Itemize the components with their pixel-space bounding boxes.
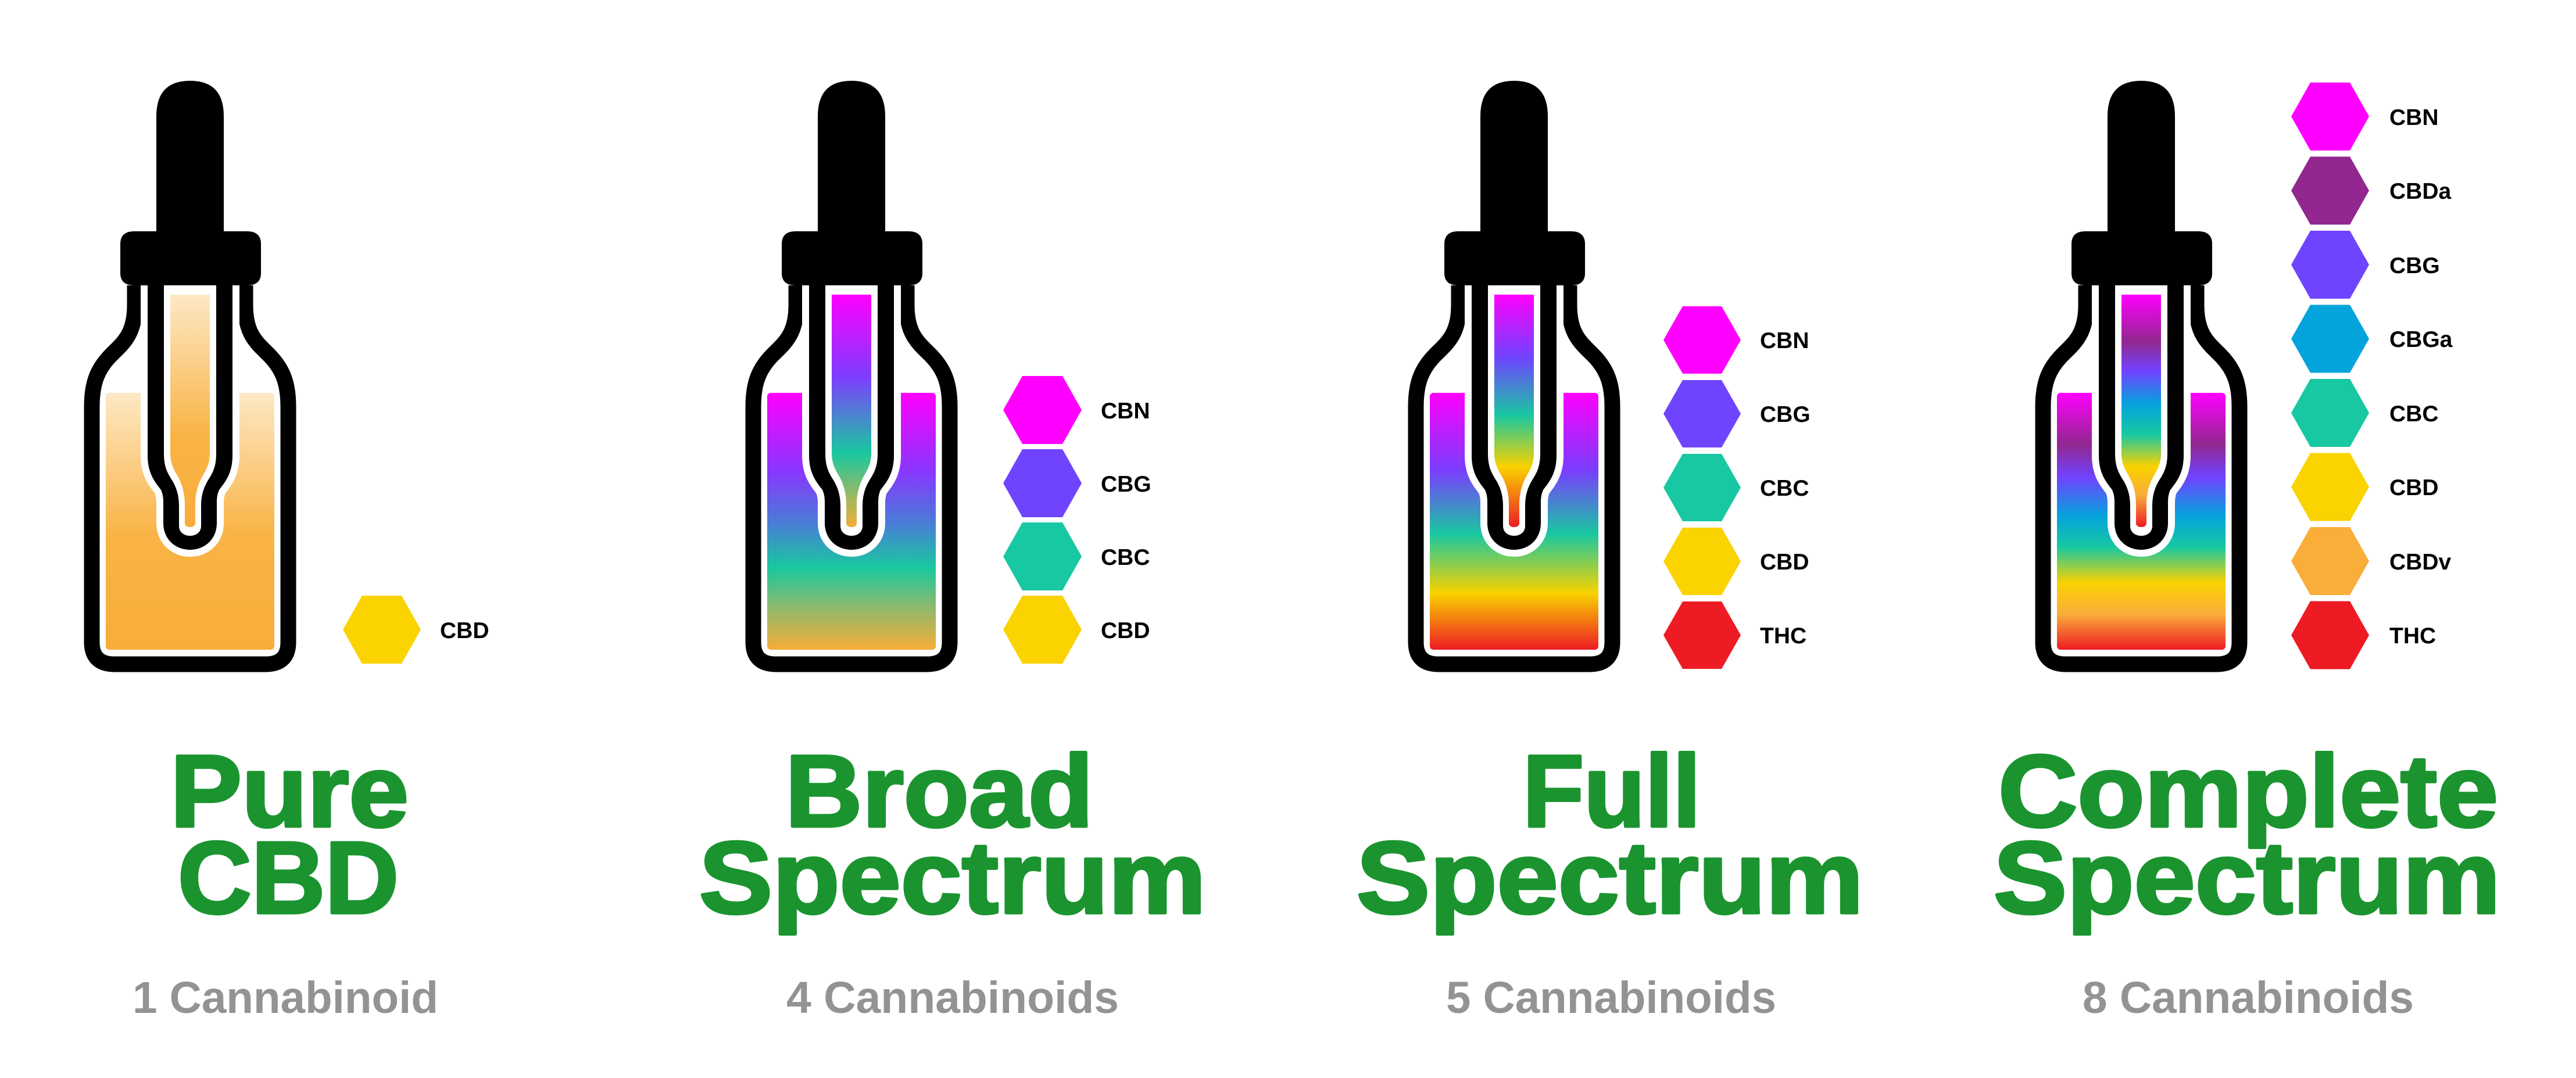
legend: complete spectrum: CBGa	[2389, 327, 2453, 352]
cap and bulb	[782, 81, 922, 285]
cap and bulb	[120, 81, 261, 285]
body liquid	[106, 393, 274, 650]
heading: Pure CBD: CBD	[178, 821, 399, 935]
cap and bulb	[2071, 81, 2212, 285]
dropper tube	[1472, 285, 1557, 550]
legend: complete spectrum: CBC	[2389, 402, 2439, 427]
heading: Complete Spectrum: Complete	[1998, 735, 2498, 848]
legend: broad spectrum: CBD	[1101, 618, 1150, 643]
legend: complete spectrum: CBDa	[2389, 179, 2451, 204]
panel: pure CBD bottle	[92, 81, 288, 664]
heading: Pure CBD: Pure	[170, 735, 409, 848]
legend: full spectrum: CBD	[1760, 550, 1809, 575]
subtitle: 5 Cannabinoids: 5 Cannabinoids	[1446, 973, 1776, 1023]
subtitle: 4 Cannabinoids: 4 Cannabinoids	[786, 973, 1119, 1023]
legend: full spectrum: CBC	[1760, 476, 1809, 501]
heading: Full Spectrum	[1357, 735, 1863, 935]
subtitle: 1 Cannabinoid: 1 Cannabinoid	[133, 973, 438, 1023]
legend: broad spectrum: CBG	[1101, 472, 1151, 497]
legend: full spectrum	[1663, 306, 1811, 669]
bottle outline	[92, 285, 288, 664]
heading: Broad Spectrum	[699, 735, 1206, 935]
legend: broad spectrum: CBN	[1101, 399, 1150, 424]
legend: pure CBD: CBD	[440, 618, 489, 643]
legend: full spectrum: CBN	[1760, 328, 1809, 353]
heading: Complete Spectrum: Spectrum	[1994, 821, 2500, 935]
legend: broad spectrum	[1003, 376, 1151, 664]
cap and bulb	[1444, 81, 1585, 285]
heading: Full Spectrum: Full	[1523, 735, 1701, 848]
dropper tube	[148, 285, 232, 550]
heading: Broad Spectrum: Spectrum	[699, 821, 1206, 935]
legend: complete spectrum	[2291, 83, 2453, 669]
legend: complete spectrum: CBD	[2389, 475, 2439, 500]
body liquid	[2057, 393, 2226, 650]
heading: Pure CBD	[170, 735, 409, 935]
subtitle: 8 Cannabinoids: 8 Cannabinoids	[2083, 973, 2414, 1023]
bottle outline	[753, 285, 950, 664]
body liquid	[1430, 393, 1598, 650]
heading: Full Spectrum: Spectrum	[1357, 821, 1863, 935]
legend: complete spectrum: CBG	[2389, 253, 2440, 278]
heading: Broad Spectrum: Broad	[785, 735, 1093, 848]
panel: complete spectrum bottle	[2043, 81, 2239, 664]
bottle outline	[2043, 285, 2239, 664]
panel: broad spectrum bottle	[753, 81, 950, 664]
legend: complete spectrum: THC	[2389, 624, 2436, 649]
body liquid	[767, 393, 936, 650]
heading: Complete Spectrum	[1994, 735, 2500, 935]
legend: broad spectrum: CBC	[1101, 545, 1150, 570]
panel: full spectrum bottle	[1416, 81, 1612, 664]
legend: full spectrum: THC	[1760, 624, 1806, 649]
legend: complete spectrum: CBN	[2389, 105, 2439, 130]
legend: complete spectrum: CBDv	[2389, 550, 2451, 575]
legend: pure CBD	[343, 596, 489, 664]
dropper tube	[2099, 285, 2184, 550]
dropper tube	[809, 285, 894, 550]
bottle outline	[1416, 285, 1612, 664]
legend: full spectrum: CBG	[1760, 402, 1811, 427]
